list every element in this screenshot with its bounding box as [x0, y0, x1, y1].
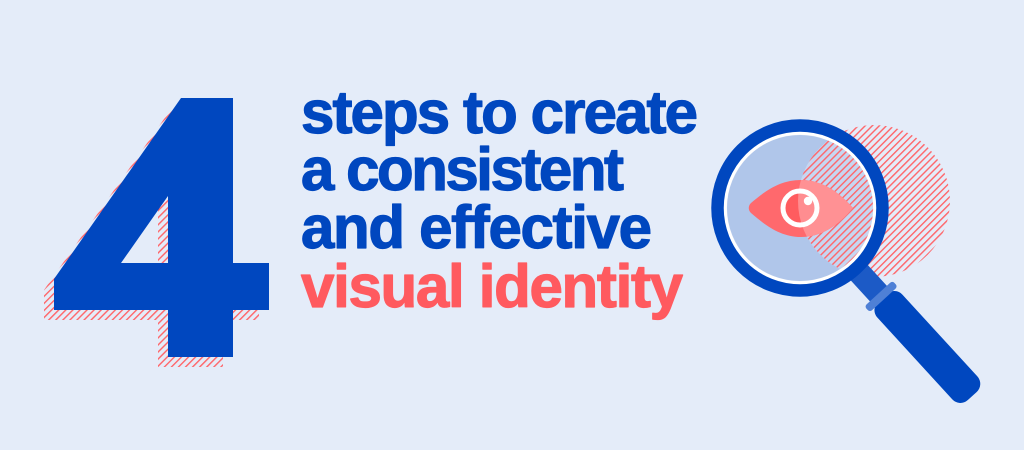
eye shape [749, 180, 853, 237]
headline line 4: visual identity: visual identity [301, 253, 684, 320]
headline line 2: a consistent [301, 136, 624, 203]
lens [727, 135, 873, 281]
eye highlight [804, 197, 812, 205]
magnifier handle [840, 254, 986, 409]
headline line 3: and effective [301, 194, 652, 261]
iris ring [783, 191, 817, 225]
icon: magnifying glass with eye [718, 125, 986, 409]
headline [301, 79, 698, 320]
iris [783, 191, 817, 225]
infographic canvas [44, 92, 980, 403]
handle grip [870, 286, 985, 407]
iris lit part [798, 194, 814, 222]
handle collar [864, 281, 898, 312]
lit hatched area in lens [801, 140, 873, 269]
big number 4 [44, 98, 269, 367]
hatched circle behind magnifier [798, 125, 950, 277]
white inner ring [725, 133, 875, 283]
hatched shadow of the 4 [44, 109, 259, 367]
headline line 1: steps to create [301, 79, 698, 146]
solid blue 4 [54, 98, 269, 357]
icon: eye [749, 180, 853, 237]
blue outer ring [718, 126, 882, 290]
eye lit part [799, 180, 853, 237]
handle neck [846, 259, 890, 304]
